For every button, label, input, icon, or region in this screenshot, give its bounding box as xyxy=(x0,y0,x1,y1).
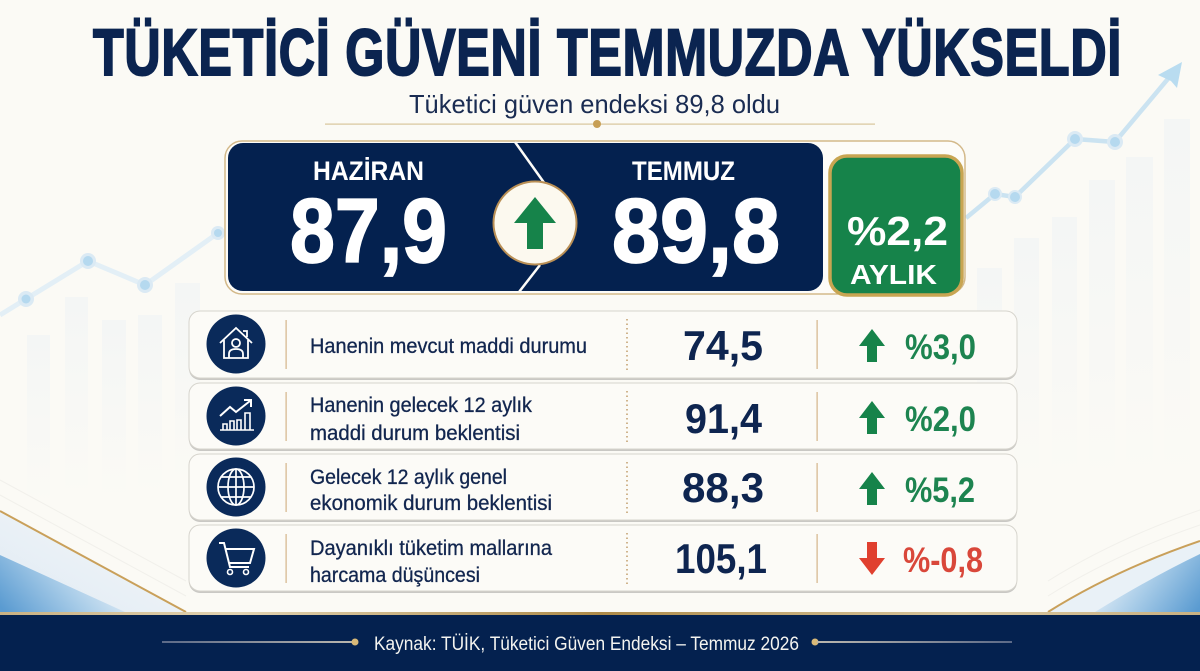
value: 74,5 xyxy=(683,322,763,369)
icon: up arrow xyxy=(859,472,885,505)
label xyxy=(310,537,552,587)
label: Gelecek 12 aylık genel xyxy=(310,466,507,489)
label: Haziran: HAZİRAN xyxy=(313,156,424,186)
icon: down arrow xyxy=(859,542,885,575)
panel: headline comparison xyxy=(225,141,965,294)
change: %2,0 xyxy=(905,400,976,439)
background trend line with arrow xyxy=(0,62,1182,315)
corner decoration: right xyxy=(1048,510,1200,612)
icon: up arrow badge xyxy=(494,182,576,264)
value: Temmuz: 89,8 xyxy=(612,181,780,282)
icon: globe xyxy=(206,458,266,516)
background bars: left xyxy=(27,283,200,505)
badge value: %2,2 xyxy=(847,208,948,254)
icon: growth chart xyxy=(206,386,266,446)
label: Dayanıklı tüketim mallarına xyxy=(310,537,552,560)
change: %3,0 xyxy=(905,328,976,367)
label xyxy=(310,466,552,515)
value: 88,3 xyxy=(682,464,764,511)
value: 105,1 xyxy=(675,535,767,582)
icon: up arrow xyxy=(859,329,885,362)
icon: house xyxy=(206,314,266,374)
row: durable goods spending xyxy=(189,525,1017,593)
divider slashes xyxy=(515,142,545,292)
label: harcama düşüncesi xyxy=(310,564,480,587)
icon: up arrow xyxy=(859,401,885,434)
value: Haziran: 87,9 xyxy=(290,181,447,282)
row: current financial situation xyxy=(189,311,1017,380)
value: 91,4 xyxy=(685,395,763,442)
corner decoration: left xyxy=(0,480,186,612)
change: %-0,8 xyxy=(903,541,983,580)
subtitle: Tüketici güven endeksi 89,8 oldu xyxy=(409,89,780,119)
label: maddi durum beklentisi xyxy=(310,422,520,445)
label: ekonomik durum beklentisi xyxy=(310,492,552,515)
label: Hanenin gelecek 12 aylık xyxy=(310,394,532,417)
icon: shopping cart xyxy=(206,528,266,588)
label: Temmuz: TEMMUZ xyxy=(632,156,735,186)
badge: monthly change xyxy=(830,156,962,295)
subtitle divider with dot xyxy=(325,120,875,128)
label: Hanenin mevcut maddi durumu xyxy=(310,335,587,358)
footer band xyxy=(0,612,1200,671)
label xyxy=(310,394,532,445)
change: %5,2 xyxy=(905,471,975,510)
background bars: right xyxy=(977,119,1190,480)
row: general economic expectation xyxy=(189,454,1017,522)
source: Kaynak: TÜİK, Tüketici Güven Endeksi – Temmuz 2026 xyxy=(374,634,799,655)
row: 12-month financial expectation xyxy=(189,383,1017,451)
badge label: AYLIK xyxy=(850,259,937,290)
title: TÜKETİCİ GÜVENİ TEMMUZDA YÜKSELDİ xyxy=(93,16,1121,90)
